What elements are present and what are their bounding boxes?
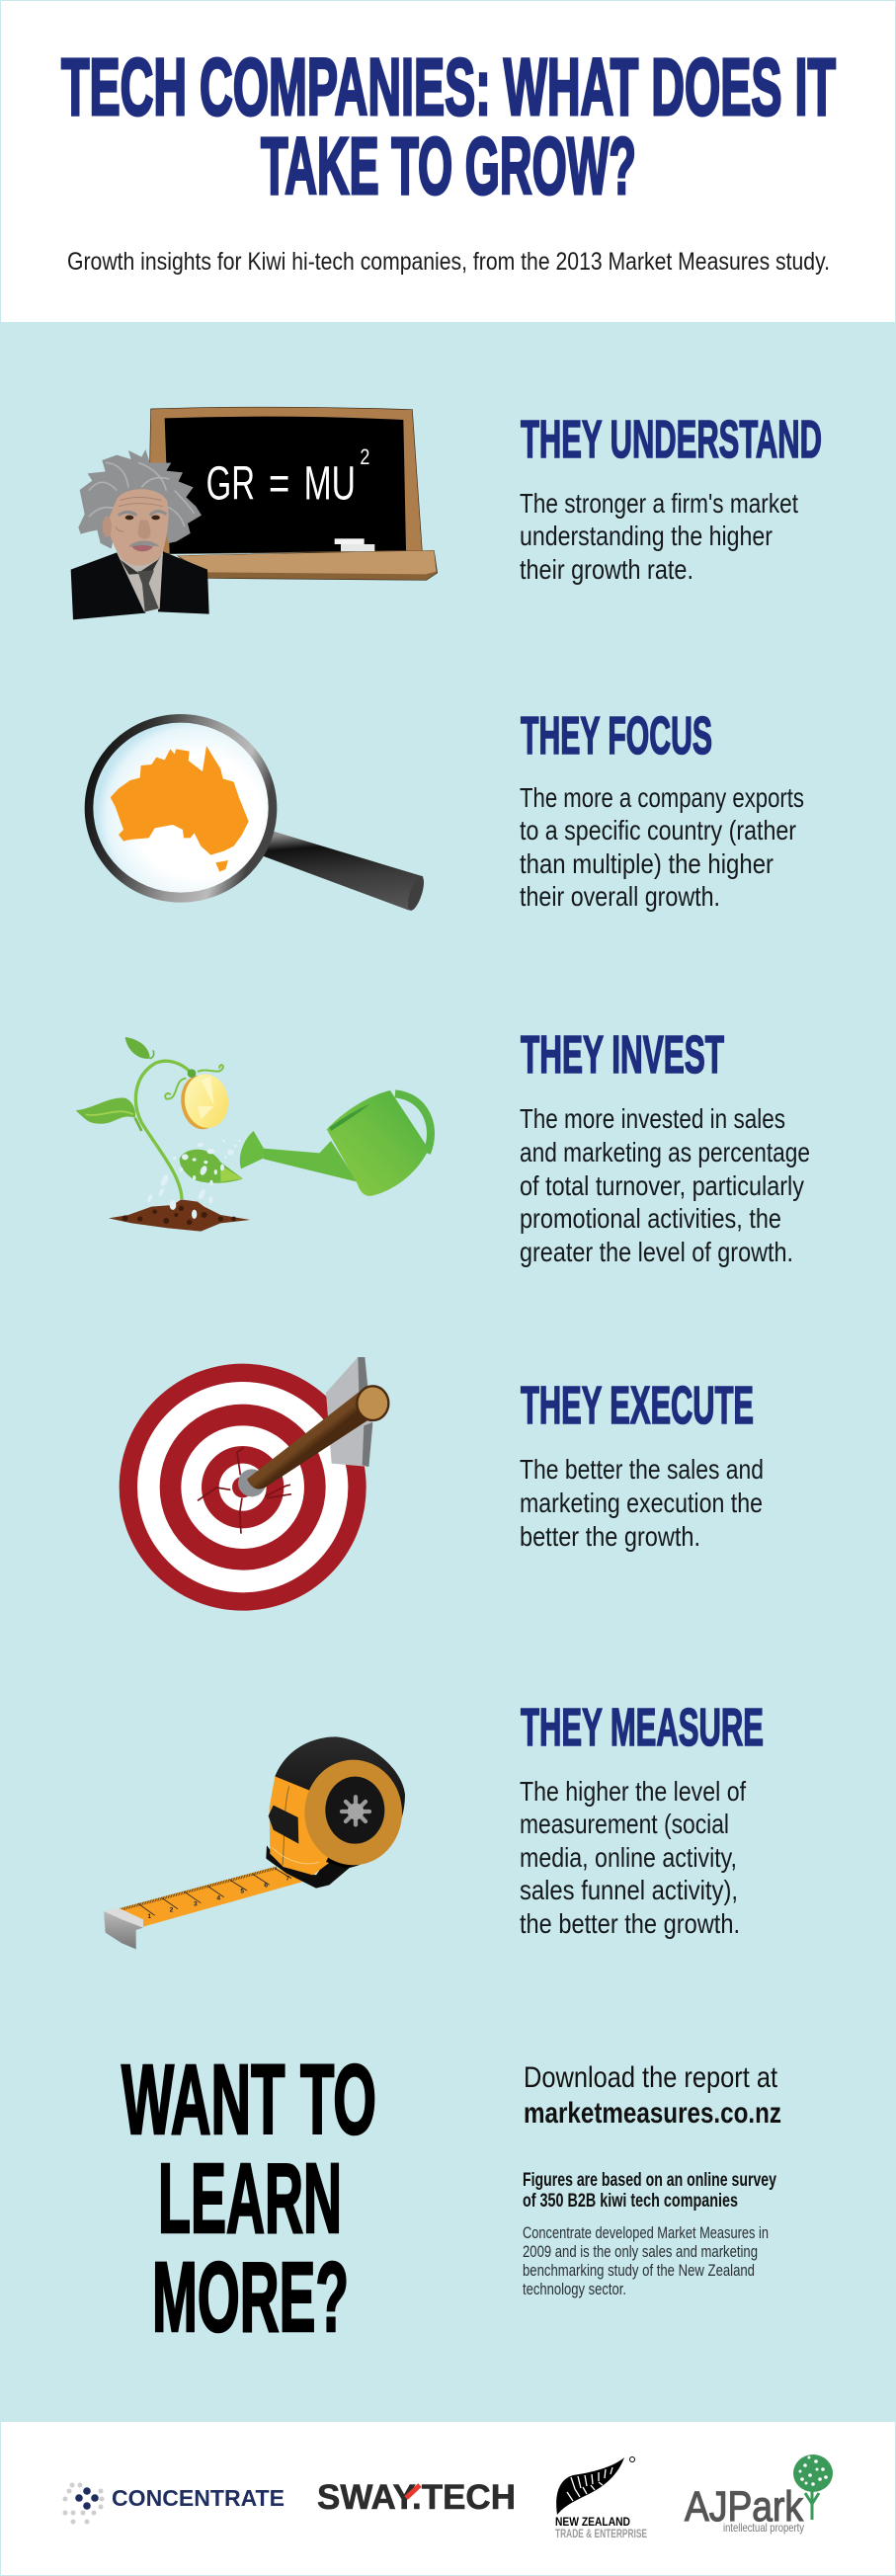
handle [263, 832, 427, 913]
soil [109, 1199, 250, 1232]
rim [85, 714, 277, 903]
equation: = [269, 457, 289, 511]
logo: Sway.Tech: SWAY.TECH [317, 2478, 516, 2517]
body text: The better the sales and [520, 1454, 764, 1485]
icon: tape measure [104, 1736, 405, 1949]
gold coin [178, 1072, 232, 1132]
heading block: they focus [520, 706, 804, 912]
body text: and marketing as percentage [520, 1137, 810, 1167]
panel: header [1, 1, 895, 322]
heading block: they invest [520, 1025, 810, 1267]
logo: Concentrate [63, 2483, 285, 2525]
shirt and tie [117, 551, 163, 611]
body text [520, 1776, 746, 1939]
body text: media, online activity, [520, 1842, 737, 1873]
lens [93, 723, 269, 893]
body text: The stronger a firm's market [520, 488, 798, 519]
target rings [120, 1364, 367, 1611]
body text [520, 1454, 764, 1552]
water droplets [146, 1140, 241, 1219]
about text [523, 2223, 769, 2298]
body text: understanding the higher [520, 521, 773, 551]
panel: logo footer [1, 2422, 895, 2575]
logo mark dots [63, 2483, 105, 2525]
body text: greater the level of growth. [520, 1237, 793, 1267]
chalk ledge [178, 550, 438, 580]
about text: technology sector. [523, 2280, 626, 2298]
logo: New Zealand Trade & Enterprise [555, 2457, 647, 2540]
tree [793, 2455, 833, 2520]
map of Australia [111, 746, 249, 872]
stem [135, 1061, 190, 1199]
body text: sales funnel activity), [520, 1875, 738, 1905]
body text: better the growth. [520, 1521, 700, 1552]
tape blade: 6 [264, 1883, 268, 1890]
case highlight [272, 1847, 319, 1864]
call to action heading [122, 2045, 376, 2353]
button [269, 1806, 298, 1844]
cracks [198, 1448, 291, 1534]
icon: Einstein at chalkboard [71, 407, 438, 619]
icon: target with arrow [120, 1357, 388, 1611]
Einstein hair [78, 449, 202, 549]
tape blade: 1 [147, 1913, 151, 1920]
download text [524, 2061, 781, 2130]
call to action heading: MORE? [152, 2242, 349, 2353]
heading block: they measure [520, 1698, 764, 1939]
call to action heading: WANT TO [122, 2045, 376, 2155]
facial features [103, 497, 166, 551]
heading block: they understand [520, 410, 822, 585]
survey note [523, 2170, 776, 2212]
chalkboard frame [148, 407, 422, 554]
tape hook [104, 1908, 143, 1949]
arrow fletching [326, 1357, 372, 1467]
logo: New Zealand Trade & Enterprise: NEW ZEALAND [555, 2515, 630, 2529]
case top [275, 1736, 405, 1869]
call to action heading: LEARN [158, 2143, 342, 2254]
download text: Download the report at [524, 2061, 778, 2094]
side disc [304, 1760, 402, 1865]
case bottom [266, 1845, 351, 1889]
logo: AJ Park: AJPark [685, 2483, 803, 2531]
body text: promotional activities, the [520, 1203, 781, 1234]
silver fern [556, 2457, 634, 2515]
tape blade [119, 1867, 303, 1927]
tape blade: 7 [285, 1875, 289, 1882]
logo: AJ Park [685, 2455, 833, 2535]
hub [325, 1777, 384, 1844]
body text: of total turnover, particularly [520, 1170, 804, 1201]
tape blade: 2 [170, 1907, 174, 1914]
body text: The more invested in sales [520, 1103, 785, 1134]
arrow end [357, 1386, 388, 1420]
chalk [335, 538, 374, 551]
about text: Concentrate developed Market Measures in [523, 2223, 769, 2242]
download text: marketmeasures.co.nz [524, 2097, 781, 2130]
calyx and curls [165, 1065, 223, 1099]
tape blade: 4 [216, 1894, 220, 1901]
icon: coin plant and watering can [76, 1037, 431, 1232]
tape blade: 3 [194, 1900, 198, 1907]
logo: Concentrate: CONCENTRATE [112, 2485, 285, 2511]
body text: measurement (social [520, 1809, 729, 1839]
equation [206, 444, 369, 511]
body text: the better the growth. [520, 1908, 740, 1939]
heading block: they focus: THEY FOCUS [521, 706, 712, 765]
seam [283, 1786, 289, 1865]
body text: The more a company exports [520, 782, 804, 813]
arrow shaft [247, 1390, 373, 1489]
body text: their growth rate. [520, 554, 693, 585]
survey note: Figures are based on an online survey [523, 2170, 776, 2191]
logo: New Zealand Trade & Enterprise: TRADE & ENTERPRISE [555, 2527, 647, 2540]
survey note: of 350 B2B kiwi tech companies [523, 2191, 738, 2212]
about text: 2009 and is the only sales and marketing [523, 2242, 758, 2261]
heading block: they invest: THEY INVEST [521, 1025, 724, 1085]
arrow impact ring [238, 1469, 266, 1496]
logo: AJ Park: intellectual property [723, 2521, 804, 2535]
watering can [240, 1090, 431, 1196]
leaves [76, 1037, 243, 1183]
hair streaks [89, 462, 195, 526]
body text: marketing execution the [520, 1488, 763, 1518]
body text: their overall growth. [520, 881, 720, 912]
equation: GR [206, 457, 255, 511]
body text: to a specific country (rather [520, 815, 796, 845]
icon: magnifying glass over Australia [85, 714, 427, 913]
heading block: they execute [520, 1376, 764, 1552]
chalkboard surface [165, 417, 406, 554]
body text: The higher the level of [520, 1776, 746, 1807]
tape blade: 5 [240, 1889, 244, 1895]
title [61, 42, 836, 211]
body text: than multiple) the higher [520, 848, 774, 879]
face [107, 489, 169, 566]
case body [270, 1776, 353, 1875]
body text [520, 1103, 810, 1267]
jacket [71, 551, 209, 619]
body text [520, 782, 804, 912]
equation: 2 [360, 444, 369, 469]
equation: MU [304, 457, 356, 511]
about text: benchmarking study of the New Zealand [523, 2261, 755, 2280]
body text [520, 488, 798, 585]
hub star [342, 1797, 369, 1824]
